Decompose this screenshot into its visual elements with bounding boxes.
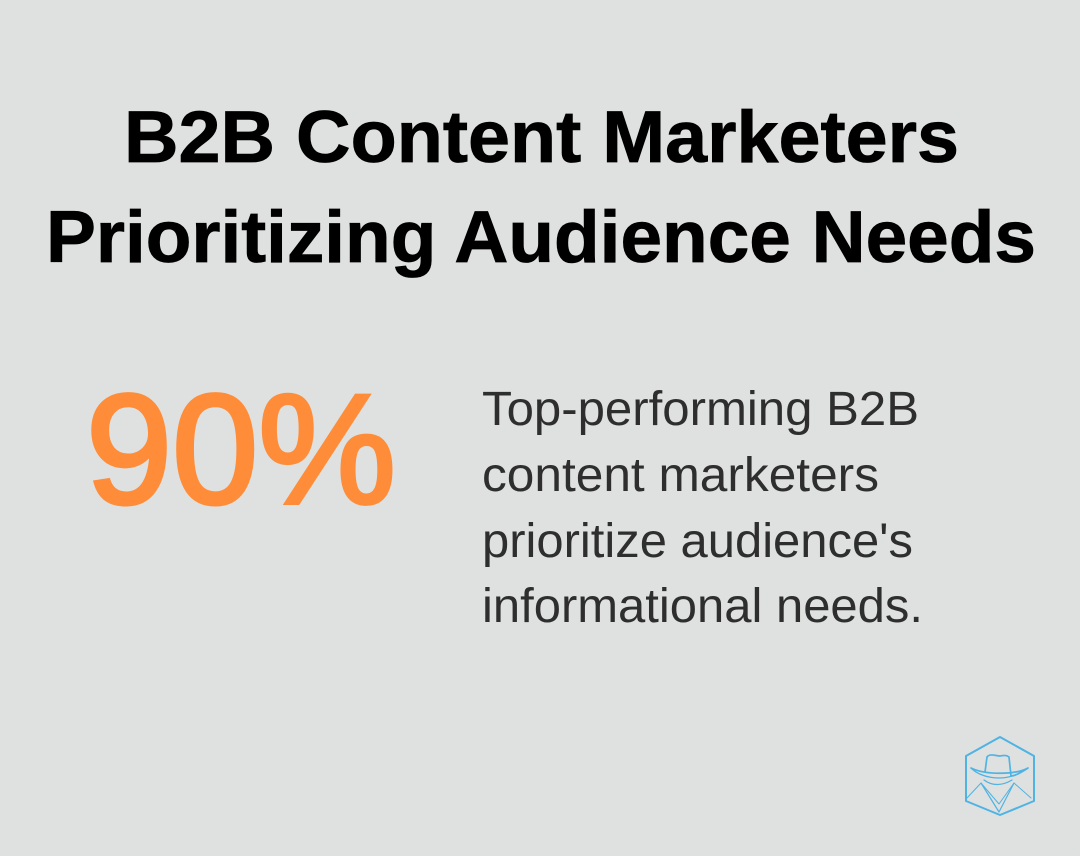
title	[46, 97, 1036, 278]
icon: hexagon spy logo	[966, 737, 1034, 815]
description text: Top-performing B2B	[482, 383, 919, 436]
big stat: 90%: 90%	[86, 363, 396, 537]
description text	[482, 383, 923, 633]
description text: prioritize audience's	[482, 515, 913, 568]
title: Prioritizing Audience Needs	[46, 197, 1036, 278]
title: B2B Content Marketers	[124, 97, 959, 178]
description text: informational needs.	[482, 580, 923, 633]
description text: content marketers	[482, 449, 879, 502]
